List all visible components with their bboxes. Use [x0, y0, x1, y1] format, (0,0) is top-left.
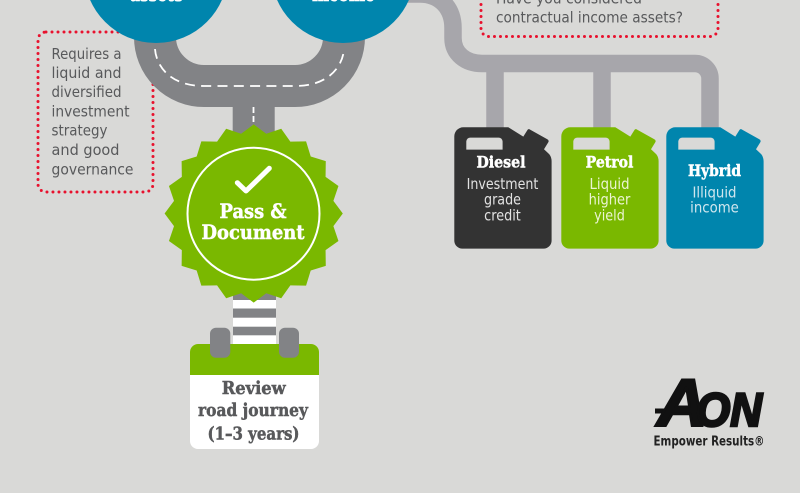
fuel can: diesel: credit	[484, 207, 521, 225]
fuel can: petrol: yield	[594, 207, 625, 225]
callout: liquid and diversified strategy: Requires a	[52, 45, 122, 63]
logo: Aon Empower Results: ON	[696, 383, 763, 436]
callout: liquid and diversified strategy: and good	[52, 141, 120, 159]
fuel can: hybrid: Illiquid	[692, 183, 736, 201]
fuel can: diesel: grade	[484, 190, 521, 208]
fuel can: hybrid: Hybrid	[688, 161, 741, 180]
road junction	[155, 30, 344, 140]
callout: liquid and diversified strategy: investment	[52, 102, 130, 120]
callout: liquid and diversified strategy: strategy	[52, 122, 108, 140]
fuel can: diesel: Diesel	[476, 153, 526, 172]
circle: assets	[84, 0, 228, 43]
callout: liquid and diversified strategy	[38, 32, 153, 192]
fuel can: petrol: Liquid	[590, 175, 630, 193]
callout: liquid and diversified strategy: governance	[52, 160, 134, 178]
logo: Aon Empower Results: Empower Results®	[654, 434, 764, 450]
fuel can: hybrid: income	[690, 199, 739, 217]
callout: liquid and diversified strategy: liquid and	[52, 64, 122, 82]
calendar: review road journey: road journey	[198, 400, 308, 421]
callout: contractual income question: contractual income assets?	[496, 8, 683, 26]
fuel can: hybrid	[666, 127, 764, 249]
circle: income	[271, 0, 415, 43]
logo: Aon Empower Results	[654, 366, 764, 450]
logo: Aon Empower Results: A	[655, 366, 707, 441]
calendar: review road journey: (1–3 years)	[208, 424, 300, 444]
badge: pass and document	[165, 124, 343, 303]
callout: contractual income question	[481, 0, 718, 36]
striped road to calendar	[233, 290, 276, 344]
badge: pass and document: Pass &	[220, 199, 286, 223]
fuel can: petrol: higher	[589, 190, 631, 208]
callout: liquid and diversified strategy: diversified	[52, 83, 122, 101]
fuel can: diesel: Investment	[467, 175, 538, 193]
fuel can: petrol	[561, 127, 659, 249]
fuel can: diesel	[454, 127, 552, 249]
fuel pipe network	[400, 0, 710, 130]
badge: pass and document: Document	[202, 220, 305, 244]
calendar: review road journey	[190, 328, 319, 449]
calendar: review road journey: Review	[222, 378, 286, 399]
fuel can: petrol: Petrol	[586, 153, 633, 172]
